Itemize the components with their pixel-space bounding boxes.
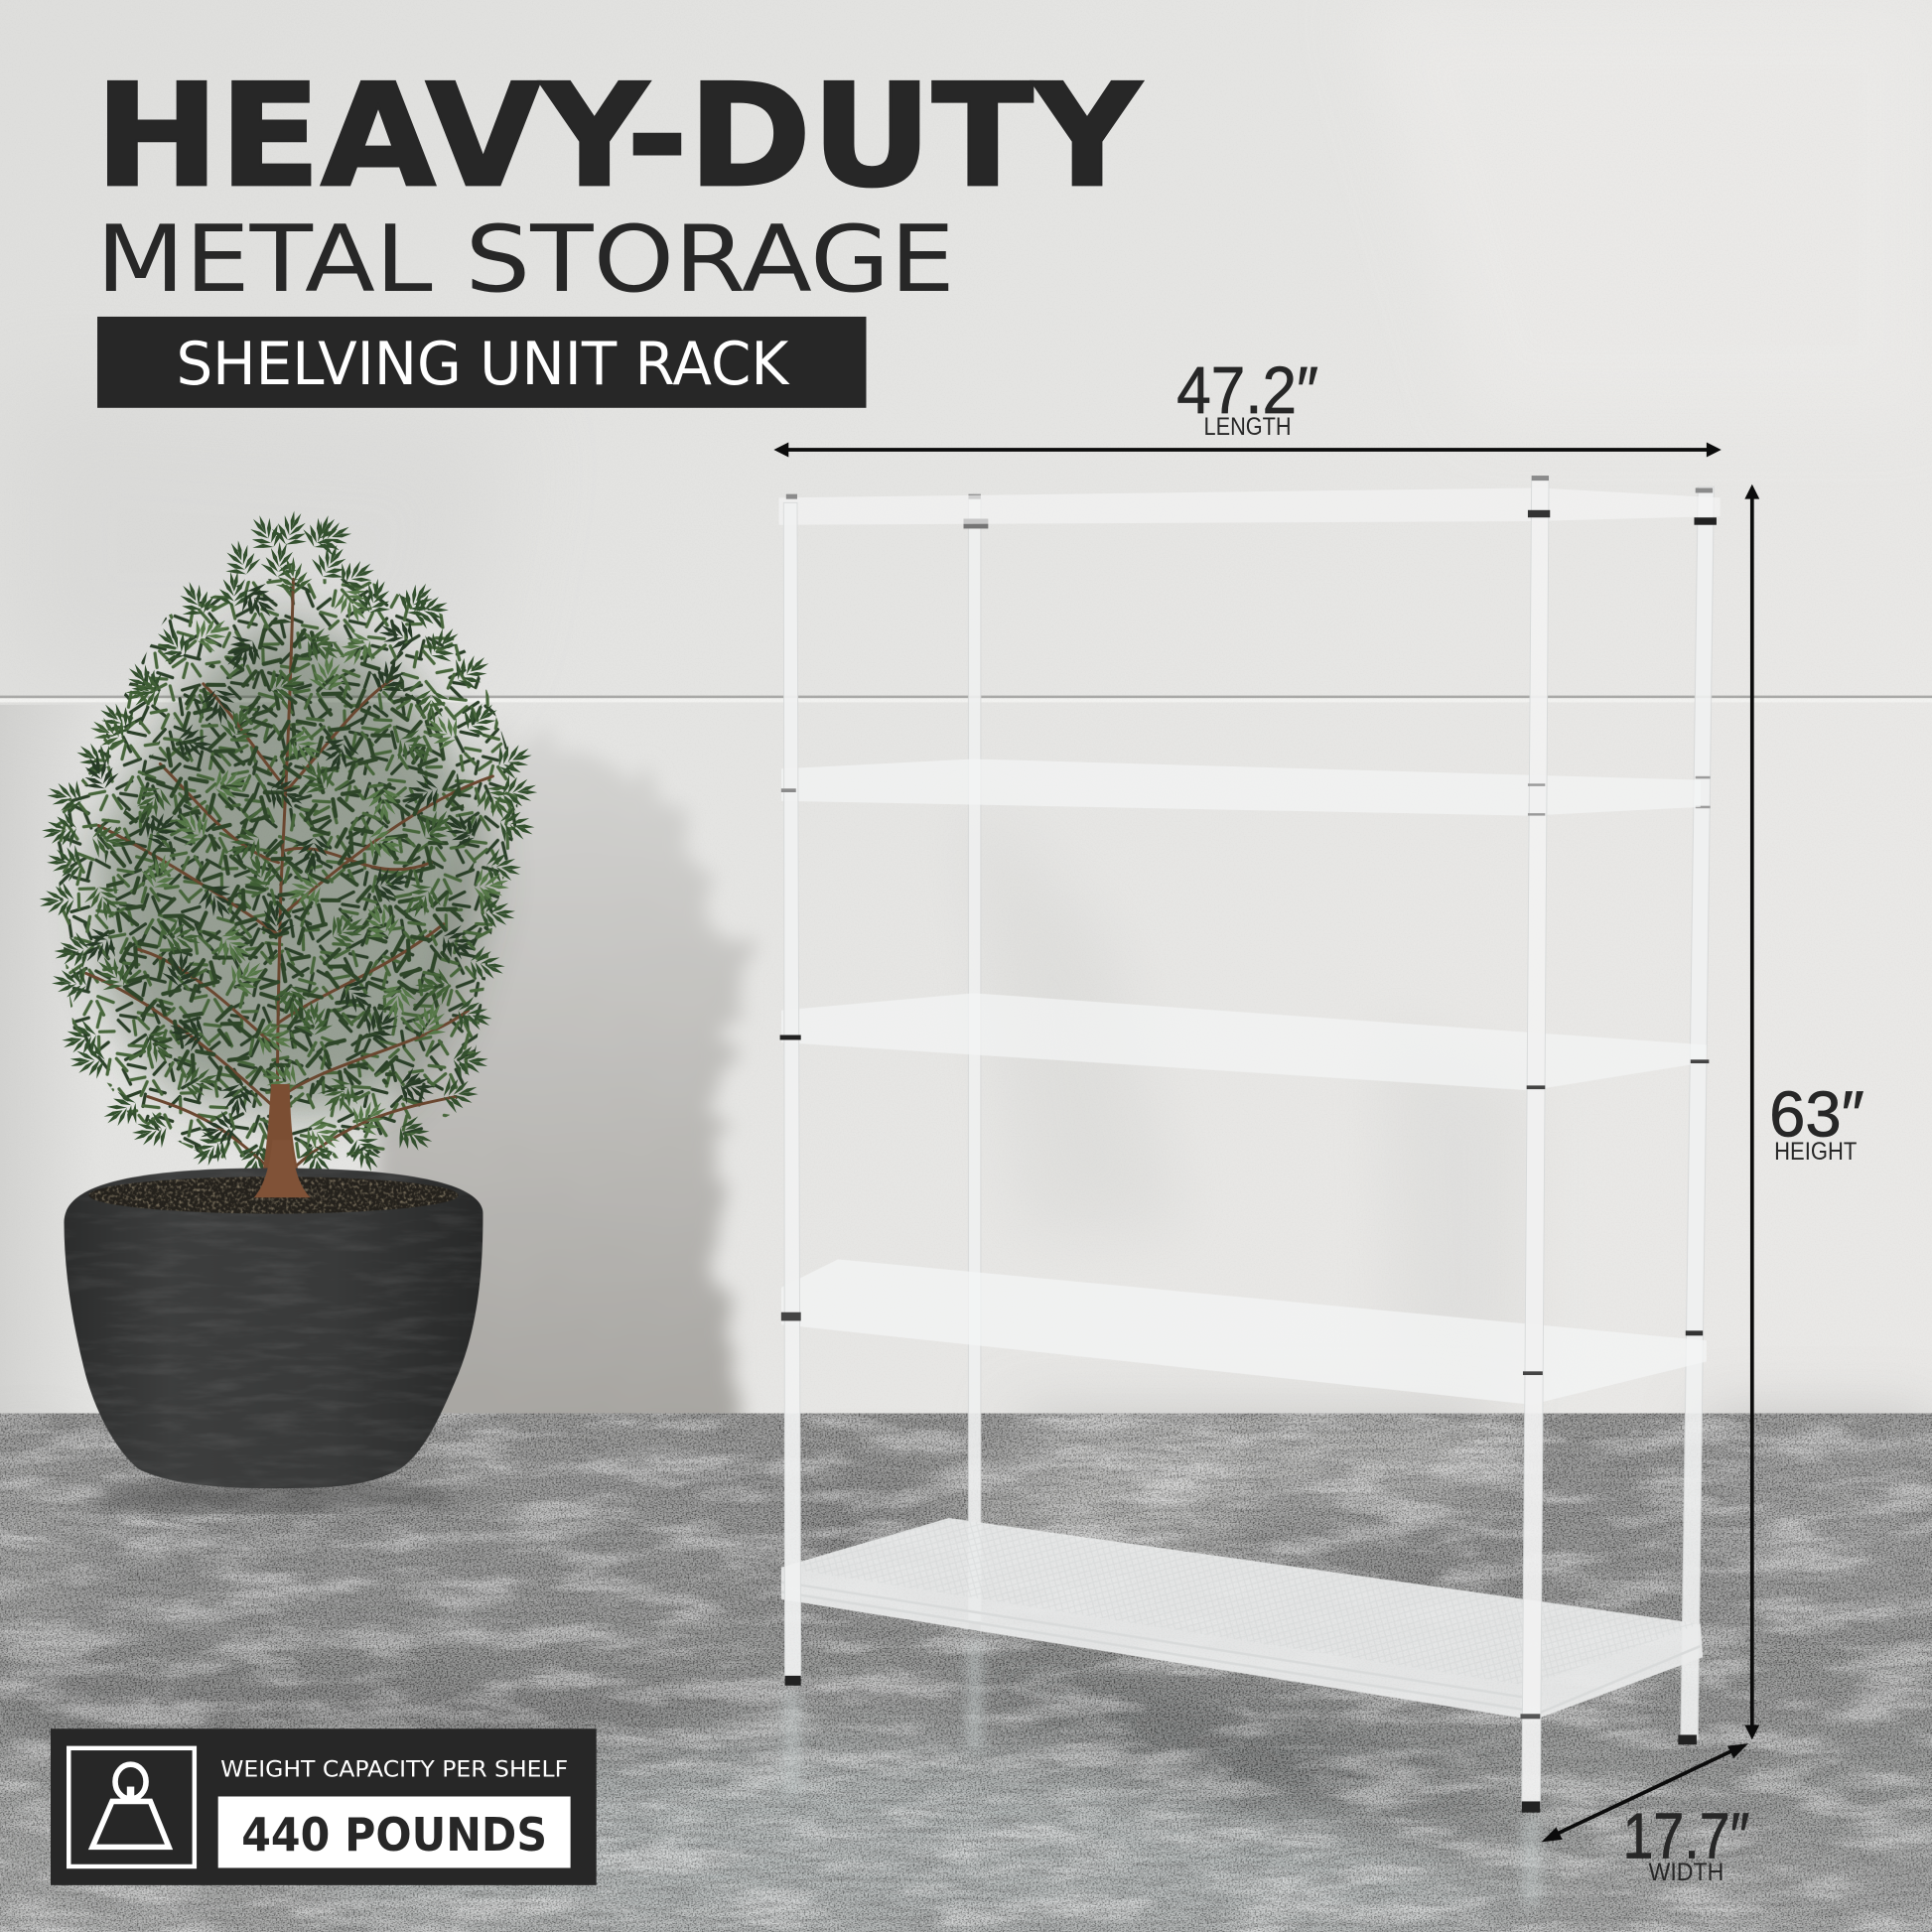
post connectors — [780, 476, 1709, 1813]
plant trunk — [254, 1084, 311, 1200]
shelf 3 — [781, 993, 1707, 1090]
arrow: width — [1542, 1743, 1748, 1842]
perimeter leaf sprays — [38, 506, 540, 1183]
dimension: length — [773, 353, 1722, 457]
plant branches — [86, 579, 492, 1182]
plant shadow on wall — [369, 736, 747, 1436]
plant foliage mass — [56, 579, 517, 1159]
leg reflections on floor — [783, 1641, 1540, 1905]
dimension: width: WIDTH — [1649, 1860, 1724, 1886]
pot texture — [65, 1169, 483, 1488]
dimension: height: 63″ — [1769, 1078, 1864, 1150]
dimension: length: LENGTH — [1204, 414, 1292, 441]
title: heavy-duty: HEAVY-DUTY — [95, 54, 1143, 218]
interior leaf sprays dark — [72, 577, 484, 1152]
banner: shelving unit rack: SHELVING UNIT RACK — [176, 331, 790, 399]
dimension: height — [1744, 484, 1864, 1739]
interior leaf sprays light — [137, 582, 510, 1161]
floor dark patches — [0, 1478, 1528, 1811]
shelving rack — [778, 476, 1721, 1905]
value box: 440 pounds: 440 POUNDS — [241, 1808, 547, 1862]
wall background — [0, 0, 1932, 1417]
trunk base — [254, 1140, 311, 1197]
arrow: length — [773, 443, 1722, 457]
back post caps — [964, 487, 1717, 1744]
dimension: width: 17.7″ — [1622, 1801, 1749, 1872]
subtitle: metal storage: METAL STORAGE — [96, 206, 955, 313]
floor light patches — [0, 1417, 1932, 1932]
arrow: height — [1744, 484, 1759, 1739]
dimension: width — [1542, 1743, 1749, 1886]
pot contact shadow — [88, 1481, 459, 1511]
concrete floor — [0, 1414, 1932, 1932]
shelf 4 — [781, 1259, 1707, 1405]
soil — [88, 1176, 459, 1213]
icon: weight — [69, 1748, 195, 1866]
shelf 5 — [781, 1518, 1703, 1721]
back posts — [968, 486, 1714, 1739]
plant foliage core — [104, 617, 475, 1097]
weight capacity badge — [51, 1728, 597, 1885]
interior leaf sprays mid — [81, 554, 521, 1122]
front posts — [783, 481, 1549, 1809]
shelf 1 — [778, 487, 1721, 525]
pot — [65, 1169, 483, 1488]
dimension: height: HEIGHT — [1774, 1139, 1857, 1166]
dimension: length: 47.2″ — [1176, 353, 1318, 428]
potted plant — [38, 506, 540, 1488]
shelf 2 — [781, 759, 1701, 816]
banner: shelving unit rack — [97, 317, 866, 408]
plant foliage density shade — [92, 617, 486, 1115]
label: weight capacity: WEIGHT CAPACITY PER SHELF — [220, 1757, 568, 1783]
